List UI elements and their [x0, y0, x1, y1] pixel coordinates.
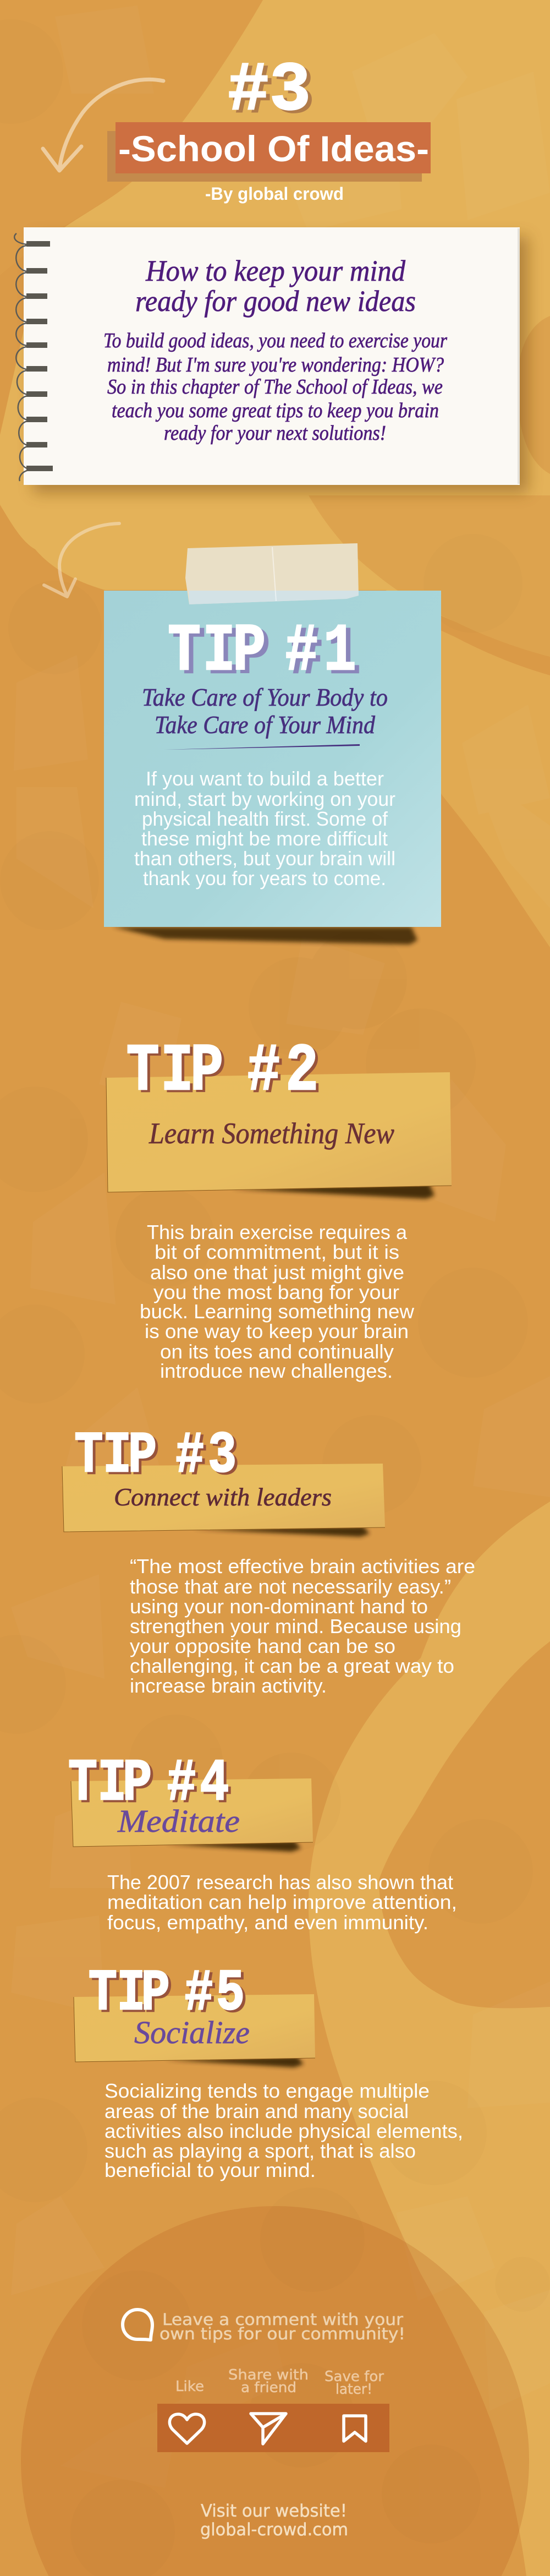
- title banner: School Of Ideas: [107, 122, 431, 182]
- tip 3 body text: increase brain activity.: [130, 1674, 327, 1697]
- tip 5 heading: TIP #5: [89, 1961, 245, 2027]
- notebook heading: [135, 254, 416, 318]
- tip 2 note: [106, 1072, 452, 1199]
- panel: tip 3: [62, 1423, 475, 1697]
- tip 3 body text: “The most effective brain activities are: [130, 1555, 475, 1578]
- panel: tip 2: [106, 1033, 452, 1382]
- notebook paragraph: [103, 329, 447, 445]
- tip 1 body text: thank you for years to come.: [143, 867, 386, 889]
- title banner: School Of Ideas: -School Of Ideas-: [118, 128, 429, 169]
- tip 2 body text: This brain exercise requires a: [147, 1221, 408, 1243]
- tip 4 body text: meditation can help improve attention,: [107, 1891, 457, 1913]
- action labels: [175, 2367, 384, 2398]
- tip 5 body text: Socializing tends to engage multiple: [105, 2080, 430, 2102]
- notebook heading: How to keep your mind: [145, 254, 406, 287]
- tip 5 body text: [105, 2080, 463, 2181]
- notebook paragraph: So in this chapter of The School of Ideas, we: [107, 375, 443, 399]
- action labels: Share with: [228, 2367, 309, 2383]
- tip 3 body text: using your non-dominant hand to: [130, 1595, 428, 1618]
- icon: speech bubble: [123, 2310, 152, 2340]
- action labels: Like: [175, 2378, 204, 2395]
- tip 1 heading: TIP #1: [168, 613, 356, 690]
- panel: notebook page introduction: [14, 227, 528, 493]
- tip 3 heading: TIP #3: [74, 1423, 237, 1489]
- tip 4 note: [71, 1778, 313, 1852]
- action labels: later!: [336, 2381, 372, 2398]
- tip 2 body text: is one way to keep your brain: [145, 1320, 409, 1342]
- tip 5 note: [74, 1994, 315, 2067]
- tip 2 body text: you the most bang for your: [153, 1281, 399, 1303]
- arrow: small curved arrow beside tip 1: [44, 523, 119, 597]
- icon: tape: [185, 543, 359, 604]
- tip 3 body text: strengthen your mind. Because using: [130, 1615, 461, 1638]
- tip 3 note: [62, 1464, 385, 1537]
- tip 2 body text: introduce new challenges.: [160, 1360, 393, 1382]
- action labels: Save for: [324, 2368, 384, 2385]
- tip 2 body text: bit of commitment, but it is: [155, 1241, 399, 1263]
- tip 4 body text: The 2007 research has also shown that: [107, 1871, 453, 1893]
- tip 5 subtitle: Socialize: [134, 2015, 250, 2050]
- tip 3 body text: your opposite hand can be so: [130, 1635, 395, 1657]
- tip 1 subtitle: Take Care of Your Mind: [155, 711, 376, 739]
- tip 2 body text: buck. Learning something new: [140, 1300, 415, 1323]
- tip 1 body text: If you want to build a better: [146, 767, 384, 790]
- tip 1 body text: physical health first. Some of: [142, 807, 388, 830]
- notebook paragraph: To build good ideas, you need to exercise your: [103, 329, 447, 352]
- tip 4 subtitle: Meditate: [117, 1803, 240, 1839]
- tip 3 body text: [130, 1555, 475, 1697]
- tip 2 body text: on its toes and continually: [160, 1340, 394, 1363]
- tip 3 body text: those that are not necessarily easy.”: [130, 1575, 451, 1598]
- tip 1 body text: [134, 767, 395, 889]
- website link: Visit our website!: [201, 2501, 347, 2521]
- notebook paragraph: teach you some great tips to keep you brain: [112, 399, 439, 422]
- tip 2 subtitle: Learn Something New: [148, 1117, 394, 1150]
- tip 5 body text: areas of the brain and many social: [105, 2100, 409, 2122]
- tip 1 body text: mind, start by working on your: [134, 788, 395, 810]
- tip 1 body text: than others, but your brain will: [134, 847, 395, 870]
- tip 3 subtitle: Connect with leaders: [114, 1483, 332, 1511]
- notebook paragraph: ready for your next solutions!: [164, 422, 386, 445]
- action labels: a friend: [241, 2379, 296, 2396]
- icon: heart: [169, 2414, 205, 2443]
- byline: -By global crowd: [205, 184, 344, 204]
- icon: paper plane: [251, 2414, 286, 2444]
- notebook paragraph: mind! But I'm sure you're wondering: HOW?: [107, 353, 444, 376]
- tip 2 body text: also one that just might give: [150, 1261, 404, 1284]
- tip 1 body text: these might be more difficult: [141, 827, 388, 850]
- comment prompt: [160, 2310, 405, 2343]
- tip 1 subtitle: Take Care of Your Body to: [142, 683, 388, 711]
- panel: call to action circle: [21, 2206, 529, 2576]
- action bar: [157, 2404, 389, 2452]
- tip 1 subtitle: [142, 683, 388, 739]
- tip 5 body text: activities also include physical elements,: [105, 2120, 463, 2142]
- arrow: curved down-left arrow beside title: [43, 79, 163, 171]
- panel: tip 1 sticky note: [104, 543, 441, 945]
- comment prompt: own tips for our community!: [160, 2324, 405, 2343]
- tip 2 body text: [140, 1221, 415, 1382]
- title: #3: #3: [228, 52, 311, 130]
- notebook heading: ready for good new ideas: [135, 285, 416, 318]
- tip 5 body text: beneficial to your mind.: [105, 2159, 316, 2181]
- panel: tip 4: [68, 1750, 457, 1934]
- tip 4 body text: focus, empathy, and even immunity.: [107, 1911, 428, 1934]
- website link: global-crowd.com: [200, 2520, 348, 2540]
- panel: tip 5: [74, 1961, 463, 2181]
- icon: bookmark: [344, 2416, 366, 2441]
- website link: [200, 2501, 348, 2540]
- tip 4 heading: TIP #4: [68, 1750, 229, 1818]
- comment prompt: Leave a comment with your: [162, 2310, 403, 2329]
- tip 1 underline: [164, 744, 360, 750]
- tip 4 body text: [107, 1871, 457, 1934]
- icon: spiral binding: [14, 233, 53, 481]
- tip 5 body text: such as playing a sport, that is also: [105, 2140, 416, 2162]
- tip 2 heading: TIP #2: [127, 1033, 318, 1110]
- tip 3 body text: challenging, it can be a great way to: [130, 1655, 454, 1677]
